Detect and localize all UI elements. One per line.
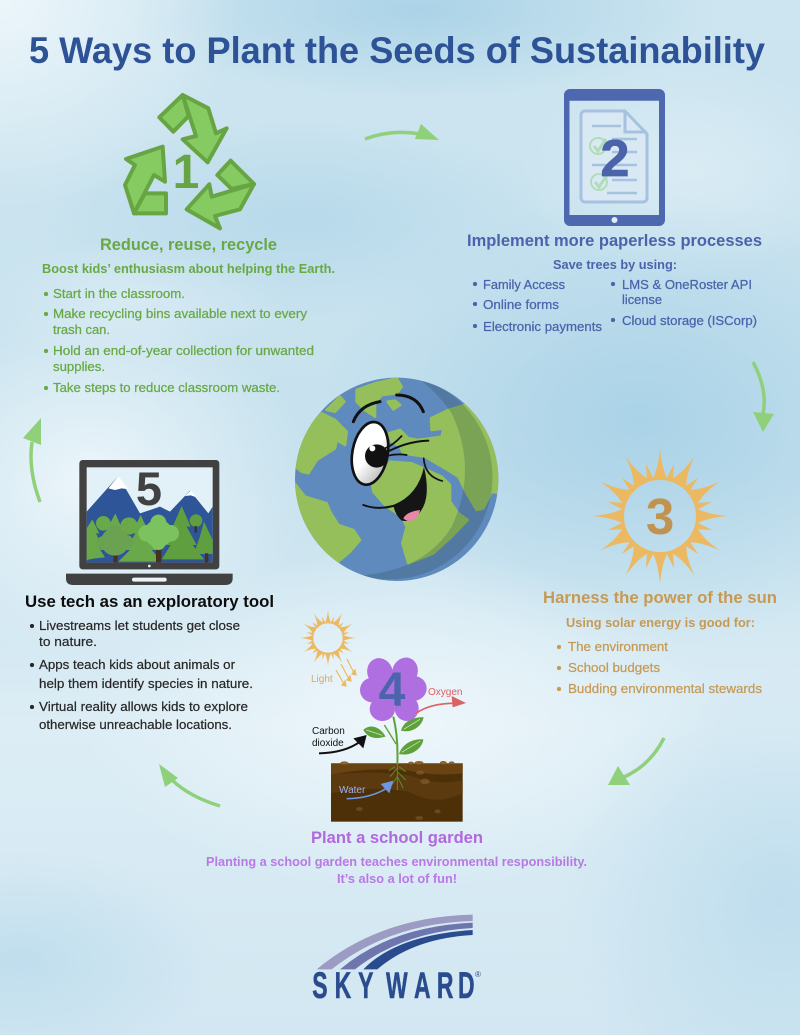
panel: step 1 recycle (42, 95, 335, 395)
title: 5 Ways to Plant the Seeds of Sustainability (29, 30, 765, 71)
list: solar benefits: Budding environmental stewards (568, 681, 763, 696)
arrow: oxygen (416, 696, 466, 713)
text: garden line 2: It’s also a lot of fun! (337, 872, 457, 886)
arrow: water (347, 781, 393, 799)
step number 1: 1 (173, 146, 199, 199)
list: solar benefits: The environment (568, 639, 668, 654)
list: recycle tips: supplies. (53, 359, 105, 374)
mountains (87, 476, 213, 562)
subheading: paperless: Save trees by using: (553, 258, 677, 272)
eye (347, 419, 393, 488)
panel: step 5 tech (25, 460, 274, 732)
list: paperless tools: Cloud storage (ISCorp) (622, 313, 757, 328)
list: paperless tools: Family Access (483, 277, 565, 292)
list: paperless tools: Online forms (483, 297, 560, 312)
list: tech uses: to nature. (39, 634, 97, 649)
list: tech uses: Livestreams let students get close (39, 618, 240, 633)
list: tech uses: Virtual reality allows kids to explore (39, 699, 248, 714)
panel: step 4 garden (206, 610, 587, 886)
list: recycle tips: Take steps to reduce classroom waste. (53, 380, 280, 395)
icon: laptop with forest (66, 460, 233, 585)
list: tech uses (30, 618, 253, 732)
heading: tech: Use tech as an exploratory tool (25, 592, 274, 611)
list: solar benefits: School budgets (568, 660, 661, 675)
roots (389, 764, 406, 790)
step number 3: 3 (646, 488, 674, 545)
list: recycle tips: Start in the classroom. (53, 286, 185, 301)
icon: small sun (300, 610, 356, 666)
panel: step 3 sun (543, 448, 777, 696)
arrow: step 5 to step 1 (23, 418, 41, 502)
list: tech uses: otherwise unreachable locations. (39, 717, 232, 732)
list: paperless tools: LMS & OneRoster API (622, 277, 752, 292)
text: garden line 1: Planting a school garden teaches environmental responsibility. (206, 855, 587, 869)
list: recycle tips: Make recycling bins available next to every (53, 306, 308, 321)
list: paperless tools: license (622, 292, 662, 307)
list: paperless tools: Electronic payments (483, 319, 602, 334)
list: paperless tools (473, 277, 757, 334)
flower petals (360, 654, 427, 721)
heading: reduce, reuse, recycle: Reduce, reuse, recycle (100, 235, 277, 254)
panel: step 2 paperless (467, 89, 762, 334)
arrow: carbon dioxide (319, 735, 367, 753)
label: carbon dioxide: Carbon (312, 726, 345, 737)
icon: sun (592, 448, 728, 584)
trees (87, 506, 213, 562)
arrow: step 3 to step 4 (608, 738, 664, 785)
heading: garden: Plant a school garden (311, 828, 483, 847)
subheading: sun: Using solar energy is good for: (566, 616, 755, 630)
logo arcs (317, 915, 473, 969)
label: light: Light (311, 674, 333, 685)
illustration: soil and plant (319, 654, 466, 822)
stem and leaves (363, 717, 424, 764)
label: water: Water (339, 785, 366, 796)
icon: recycling arrows (125, 95, 254, 228)
step number 5: 5 (136, 462, 162, 515)
logo wordmark: SKYWARD (312, 964, 475, 1006)
arrow: step 2 to step 3 (753, 362, 774, 432)
soil (331, 761, 463, 822)
step number 2: 2 (601, 130, 629, 188)
label: oxygen: Oxygen (428, 687, 462, 698)
icon: tablet with document (564, 89, 665, 226)
subheading: recycle: Boost kids’ enthusiasm about helping the Earth. (42, 261, 335, 276)
step number 4: 4 (379, 664, 406, 717)
mouth (363, 458, 442, 521)
logo: Skyward (312, 915, 481, 1006)
label: dioxide: dioxide (312, 738, 344, 749)
heading: sun: Harness the power of the sun (543, 588, 777, 607)
arrow: step 1 to step 2 (365, 124, 439, 140)
icon: smiling globe (293, 378, 500, 581)
heading: paperless: Implement more paperless processes (467, 231, 762, 250)
list: tech uses: Apps teach kids about animals or (39, 657, 236, 672)
arrow: step 4 to step 5 (159, 764, 220, 806)
list: solar benefits (557, 639, 763, 696)
list: recycle tips: Hold an end-of-year collection for unwanted (53, 343, 314, 358)
list: recycle tips: trash can. (53, 322, 110, 337)
icon: light rays (336, 659, 356, 686)
list: recycle tips (44, 286, 314, 395)
list: tech uses: help them identify species in nature. (39, 676, 253, 691)
eyelashes and brows (353, 395, 428, 456)
registered mark: ® (475, 970, 481, 979)
